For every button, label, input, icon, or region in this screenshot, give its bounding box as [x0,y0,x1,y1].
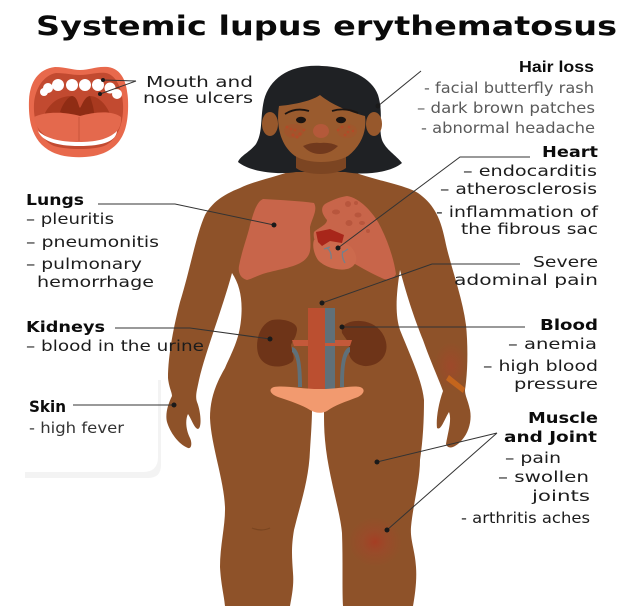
label: lungs: – pleuritis [26,210,114,228]
lips [303,143,338,154]
right lung [314,196,396,280]
label: heart: - inflammation of [436,203,599,221]
label: heart: the fibrous sac [461,220,598,238]
butterfly rash [284,124,357,138]
neck [296,145,346,174]
label: hair loss: – dark brown patches [417,99,595,117]
label: blood [483,316,598,393]
label: heart: – endocarditis [463,162,597,180]
label: lungs: – pneumonitis [26,233,159,251]
label: muscle and joint [461,409,598,527]
label: kidneys: Kidneys [26,318,105,336]
label: muscle and joint: – swollen [498,468,589,486]
label: lungs: hemorrhage [37,273,154,291]
label: hair loss: Hair loss [519,59,594,76]
label: mouth and nose ulcers [143,73,253,107]
label: hair loss: - facial butterfly rash [424,79,594,97]
label: abdominal pain: Severe [533,253,598,271]
ureters and vessels [292,308,352,390]
label: heart: – atherosclerosis [440,180,597,198]
label: blood: Blood [540,316,598,334]
label: hair loss: - abnormal headache [421,119,595,137]
label: lungs: – pulmonary [26,255,142,273]
label: mouth and nose ulcers: nose ulcers [143,89,253,107]
label: lungs [26,191,159,291]
rash on wrist [434,342,468,393]
label: kidneys: – blood in the urine [26,337,204,355]
eyes and brows [285,109,358,123]
ears [262,112,382,136]
label: skin: Skin [29,397,66,416]
label: blood: – anemia [508,335,597,353]
label: muscle and joint: Muscle [528,409,598,427]
left lung [239,199,315,280]
heart [313,229,356,270]
label: hair loss [417,59,595,137]
callout dots [98,78,390,532]
label: lungs: Lungs [26,191,84,209]
knee crease [252,528,270,530]
icon: open mouth [29,67,128,157]
label: blood: pressure [514,375,598,393]
label: abdominal pain: adominal pain [454,271,598,289]
label: abdominal pain [454,253,598,289]
label: mouth and nose ulcers: Mouth and [146,73,253,91]
label: heart [436,143,599,238]
body silhouette [166,168,471,606]
label: skin: - high fever [29,419,125,437]
inflamed knee [348,517,402,567]
nose [313,124,329,138]
label: blood: – high blood [483,357,598,375]
label: muscle and joint: and Joint [504,428,597,446]
label: heart: Heart [542,143,598,161]
label: skin [29,397,125,437]
label: muscle and joint: joints [531,487,590,505]
lung spots [332,201,370,233]
faded panel behind skin label [25,380,161,478]
label: kidneys [26,318,204,355]
label: muscle and joint: - arthritis aches [461,509,590,527]
callout lines [73,71,530,530]
title: Systemic lupus erythematosus [36,11,617,42]
hair [238,66,402,174]
left kidney [257,320,297,367]
label: muscle and joint: – pain [505,449,561,467]
right kidney [342,321,386,366]
face [278,95,365,162]
pelvis [271,386,364,413]
